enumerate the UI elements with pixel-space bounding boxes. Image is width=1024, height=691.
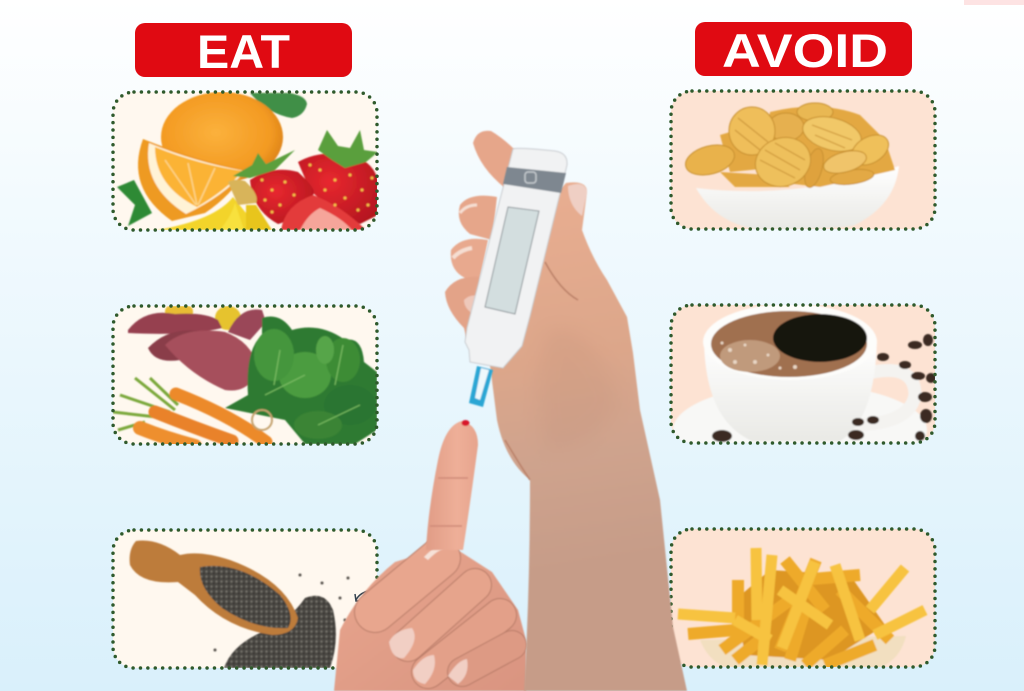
thumb bbox=[375, 558, 440, 612]
panel: fruits bbox=[113, 92, 378, 230]
palm shading bbox=[538, 329, 620, 450]
fingers gripping device bbox=[445, 196, 497, 345]
panel: potato chips bbox=[671, 91, 935, 229]
device screen bbox=[485, 207, 539, 314]
thumb crease bbox=[505, 262, 578, 480]
closed fist bbox=[334, 541, 526, 691]
panel: french fries bbox=[671, 529, 935, 667]
glucose meter device bbox=[465, 148, 567, 407]
first curled finger bbox=[408, 585, 475, 645]
blood drop bbox=[462, 420, 470, 426]
small arrow mark near scoop bbox=[355, 590, 372, 601]
second curled finger bbox=[428, 615, 500, 672]
panel: sweet potatoes, carrots, spinach bbox=[113, 306, 377, 446]
palm of fist bbox=[334, 545, 526, 691]
panel: chia seeds in wooden scoop bbox=[113, 530, 377, 668]
heading: EAT bbox=[135, 23, 352, 78]
device band bbox=[503, 167, 566, 193]
device body bbox=[465, 148, 567, 368]
hand and forearm holding device bbox=[445, 131, 687, 691]
thumb nail bbox=[568, 184, 587, 216]
heading: EAT: EAT bbox=[197, 25, 290, 78]
palm and forearm bbox=[490, 182, 687, 691]
finger nails bbox=[389, 628, 468, 684]
heading: AVOID bbox=[695, 22, 912, 77]
test strip bbox=[469, 366, 493, 407]
panel: coffee cup bbox=[669, 303, 937, 445]
heading: AVOID: AVOID bbox=[722, 24, 888, 77]
index finger with blood drop bbox=[426, 420, 478, 550]
third curled finger bbox=[462, 645, 512, 672]
top finger behind device bbox=[473, 131, 515, 188]
